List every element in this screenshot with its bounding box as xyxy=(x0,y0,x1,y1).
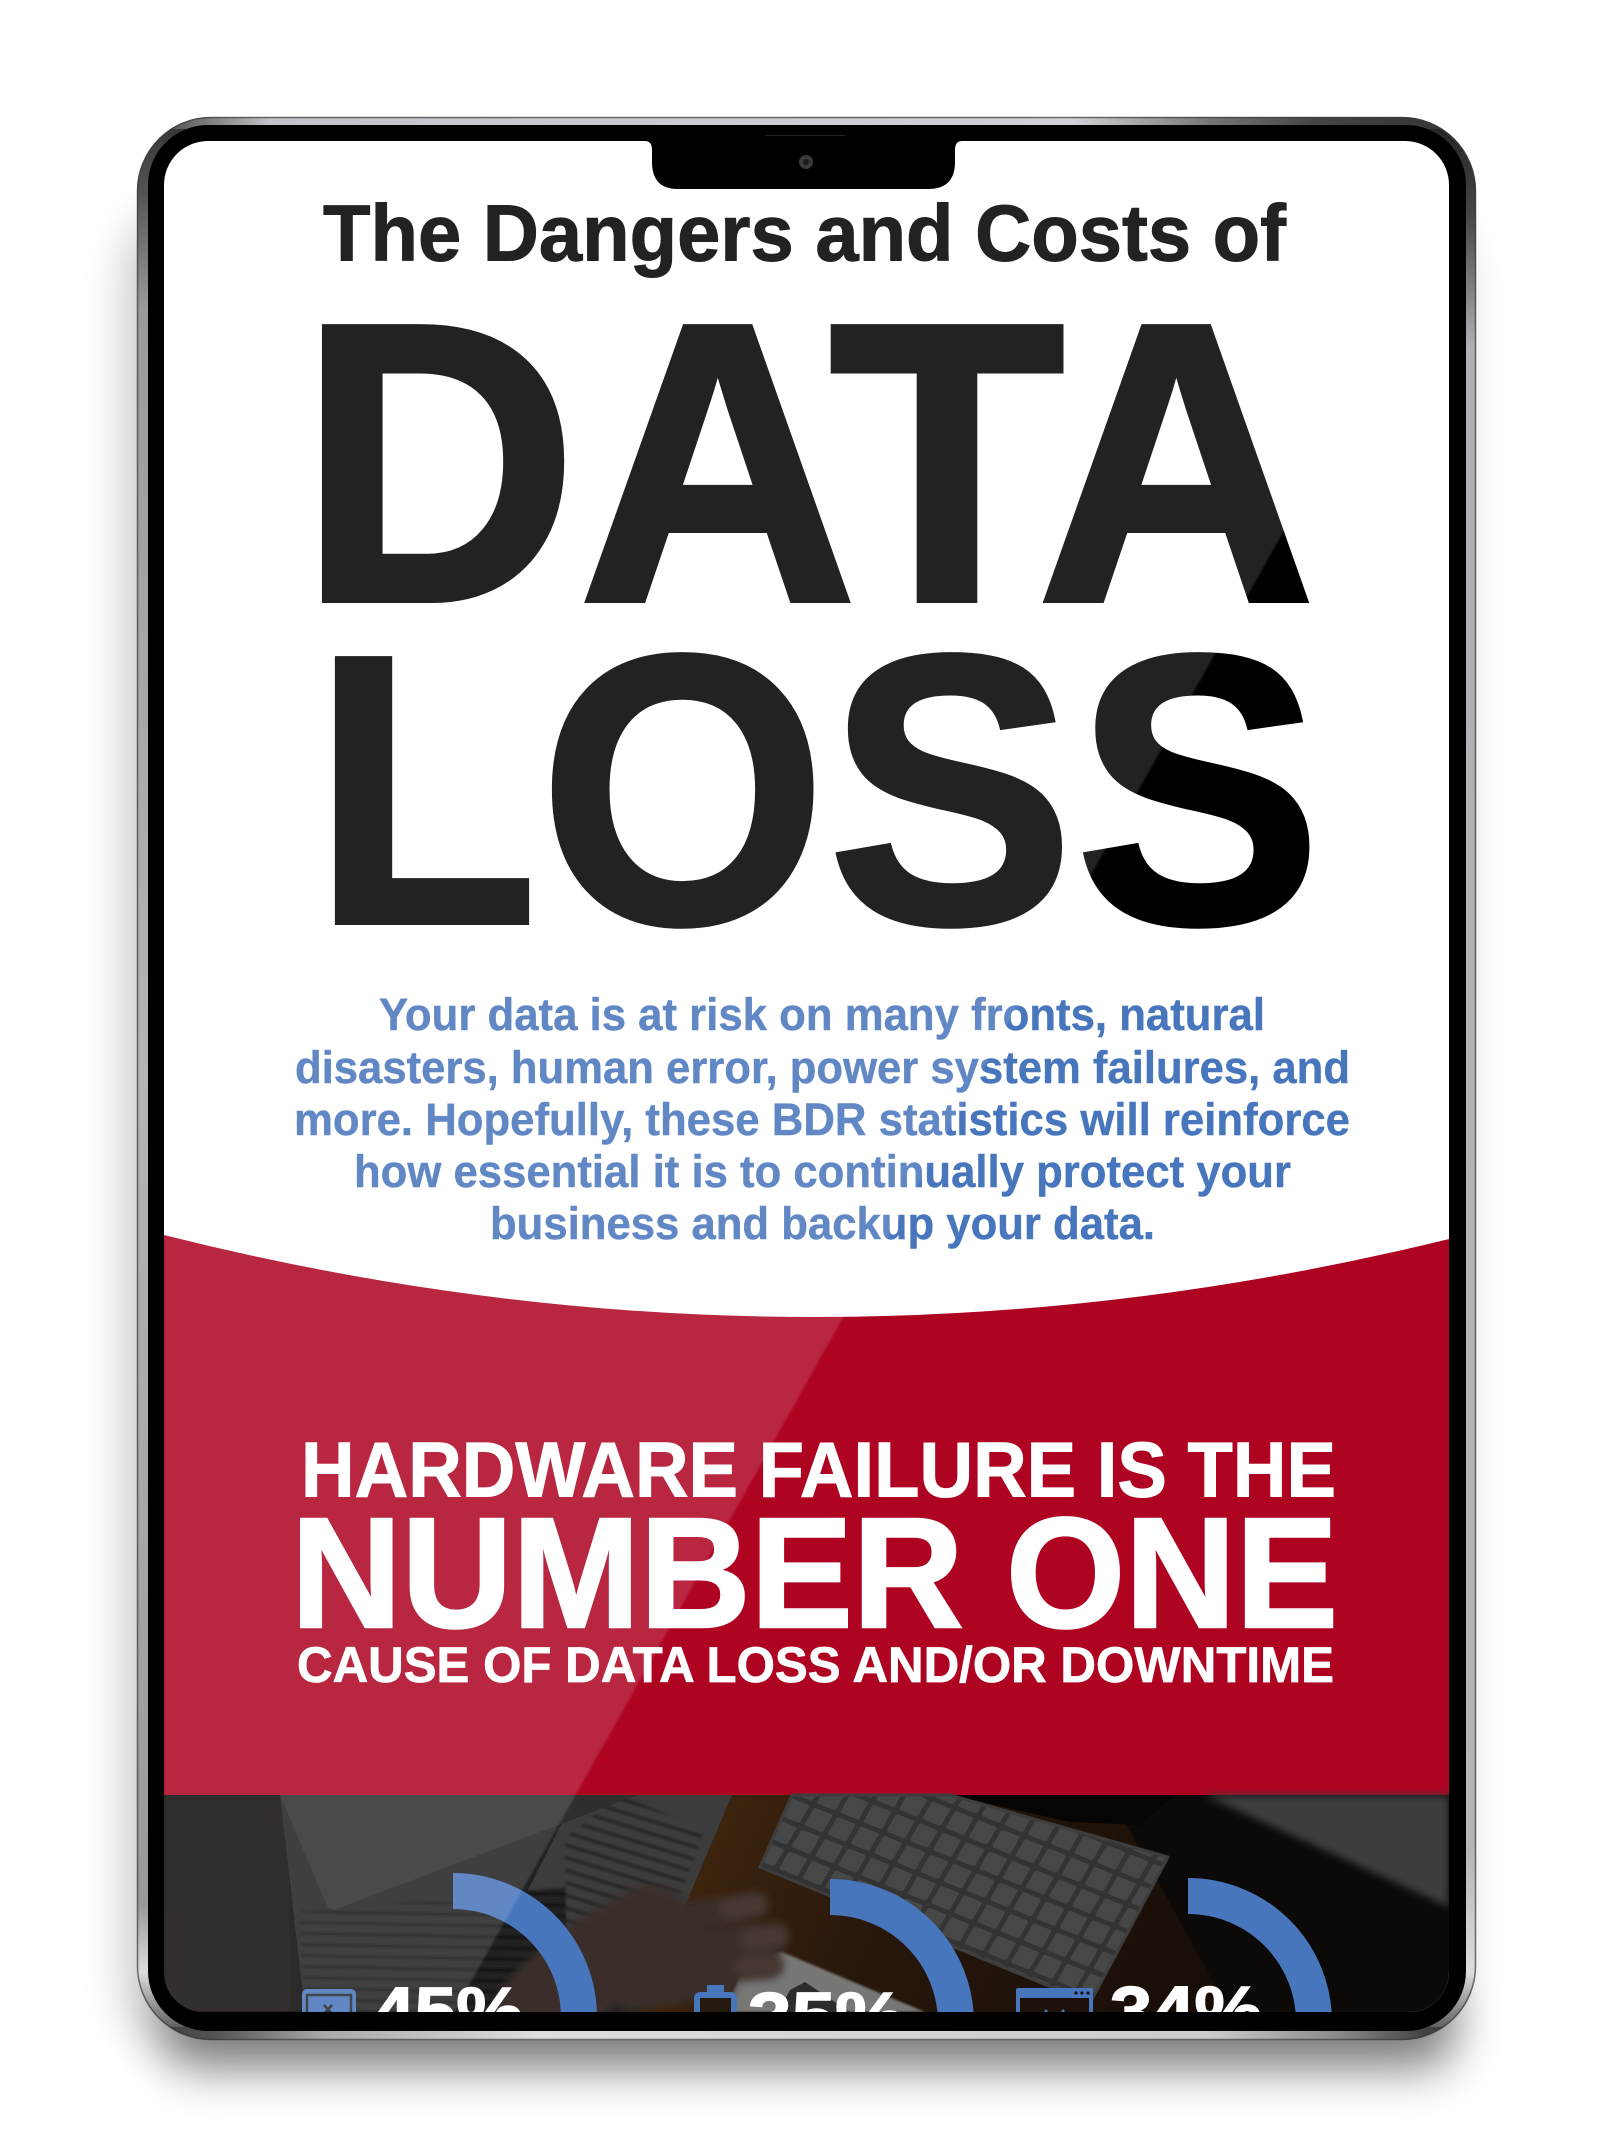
icon: battery xyxy=(697,1985,734,2035)
intro paragraph: how essential it is to continually protect your xyxy=(354,1146,1291,1197)
panel: red hardware failure band xyxy=(164,1235,1449,1795)
device drop shadow xyxy=(126,210,1461,2070)
paper text lines left xyxy=(301,1887,567,2004)
intro paragraph: more. Hopefully, these BDR statistics will reinforce xyxy=(294,1094,1350,1145)
stat: 34% xyxy=(1016,1896,1314,2050)
notch with camera xyxy=(645,135,962,189)
keypad detail xyxy=(786,1982,850,2012)
intro paragraph xyxy=(294,989,1350,1249)
paper text lines right xyxy=(564,1794,703,1930)
heading: hardware failure is the: HARDWARE FAILURE IS THE xyxy=(301,1428,1336,1514)
intro paragraph: Your data is at risk on many fronts, natural xyxy=(379,989,1265,1040)
icon: browser window xyxy=(1016,1988,1093,2038)
tablet edge xyxy=(956,1795,1126,1824)
value: 45% xyxy=(373,1973,523,2051)
paper lit part right xyxy=(528,1795,732,1903)
glass reflection xyxy=(164,141,1449,2012)
speaker line xyxy=(765,135,845,136)
panel: dark desk photo xyxy=(164,1795,1449,2012)
icon: monitor with x xyxy=(304,1991,354,2035)
value: 35% xyxy=(748,1978,905,2056)
stat: 45% xyxy=(304,1891,579,2051)
big title: LOSS: LOSS xyxy=(312,574,1322,1005)
heading: cause of data loss: CAUSE OF DATA LOSS AND/OR DOWNTIME xyxy=(297,1636,1334,1693)
gauge arc xyxy=(830,1897,956,2023)
envelope xyxy=(280,1795,637,1910)
wooden desk xyxy=(640,1795,1230,2012)
intro paragraph: business and backup your data. xyxy=(490,1198,1155,1249)
intro paragraph: disasters, human error, power system failures, and xyxy=(295,1042,1350,1093)
heading: number one: NUMBER ONE xyxy=(291,1486,1338,1661)
big title: DATA: DATA xyxy=(298,242,1316,686)
paper stack xyxy=(280,1796,642,2012)
tablet frame xyxy=(137,117,1476,2040)
hand xyxy=(540,1904,777,2012)
laptop corner xyxy=(1204,1795,1449,1907)
heading line: The Dangers and Costs of: The Dangers and Costs of xyxy=(323,188,1286,278)
gauge arc xyxy=(453,1891,579,2017)
stat: 35% xyxy=(697,1897,956,2056)
keyboard xyxy=(760,1795,1168,2003)
value: 34% xyxy=(1110,1972,1262,2050)
gauge arc xyxy=(1188,1896,1314,2022)
screen content xyxy=(164,141,1449,2056)
trackpad xyxy=(725,1952,925,2012)
camera lens xyxy=(799,155,813,169)
